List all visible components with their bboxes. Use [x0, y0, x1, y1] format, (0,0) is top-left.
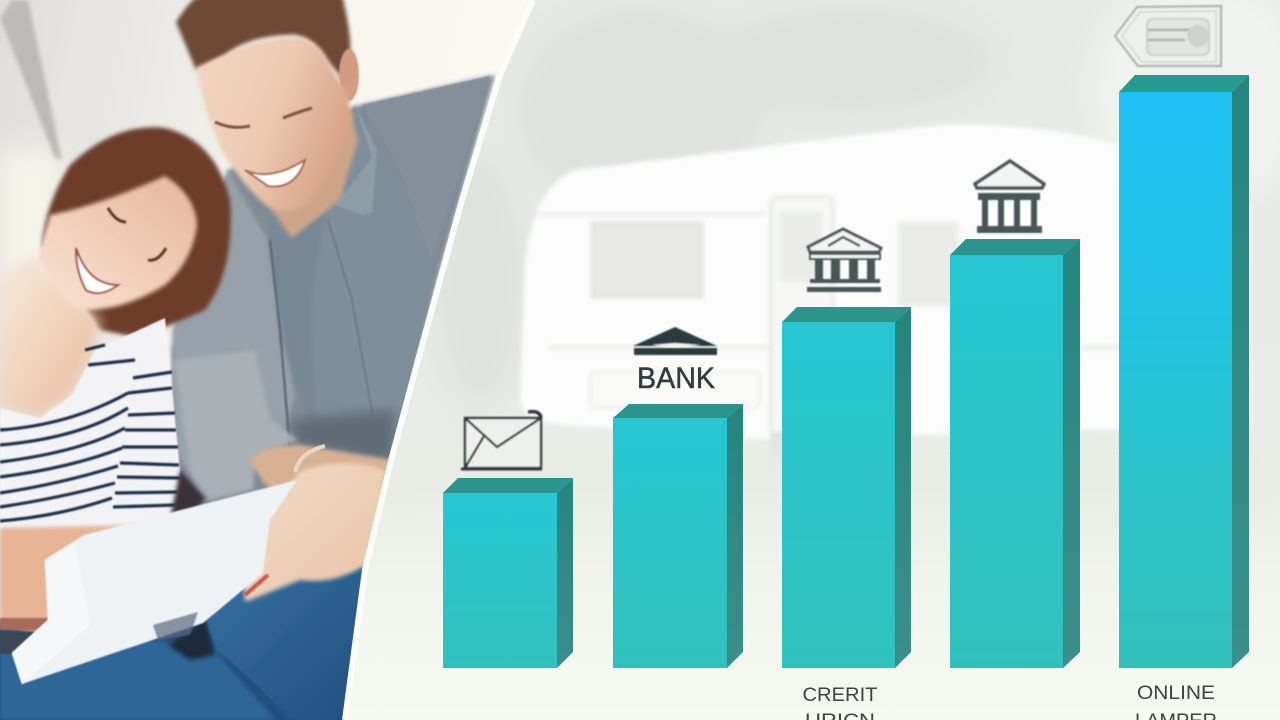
icon: credit union building: [807, 229, 881, 292]
man's shirt: [350, 104, 358, 112]
dark seat gap: [168, 468, 208, 514]
man's shirt placket: [328, 220, 372, 412]
faded light sky corner: [1090, 0, 1280, 210]
man's hair: [176, 0, 350, 78]
icon: classical bank building: [975, 161, 1044, 233]
faded tree line: [430, 0, 1000, 410]
curtain: [0, 0, 62, 160]
room wall: [0, 0, 530, 530]
bar 5: [1119, 75, 1249, 668]
jeans: front leg: [0, 640, 275, 720]
man's ear: [339, 49, 359, 101]
label: online lender: [1135, 683, 1217, 720]
woman's face: [38, 176, 197, 310]
bar 1: [443, 478, 573, 668]
man's lower shirt shadow: [290, 410, 395, 462]
label: online lender: ONLINE: [1137, 683, 1215, 704]
man's eyes: [215, 108, 312, 127]
man's jacket: [169, 72, 496, 614]
bar 4: [950, 239, 1080, 668]
man's face: [196, 37, 352, 211]
painted nails: [245, 575, 268, 595]
label: BANK: BANK: [637, 362, 715, 395]
jeans: right leg: [205, 565, 372, 720]
background: faded caravan scene: [340, 0, 1280, 720]
paper document: [12, 480, 297, 684]
woman's hair: [42, 127, 231, 338]
dark gap between legs: [168, 620, 215, 660]
shirt collar: [336, 112, 377, 214]
bar 3: [782, 307, 911, 668]
icon: bank roof: [633, 327, 717, 355]
jeans: dark base: [0, 620, 380, 720]
woman's neck and chest: [0, 255, 100, 418]
woman's striped top: [0, 318, 180, 528]
man's smile: [245, 160, 305, 186]
diagonal white divider: [345, 0, 533, 720]
faded caravan: [520, 125, 1250, 468]
photo: smiling couple reading a document: [0, 0, 540, 720]
label: credit union: CRERIT: [802, 685, 878, 706]
man's sleeve: [174, 350, 298, 500]
lapel line: [270, 240, 290, 450]
woman's arm: [0, 522, 128, 633]
bracelet: [295, 446, 325, 472]
faded ground: [380, 452, 1280, 502]
label: credit union: [802, 685, 878, 720]
forearm: [250, 445, 392, 510]
icon: envelope: [461, 412, 542, 469]
woman's smile: [76, 248, 118, 293]
icon: online lender card tag: [1115, 6, 1221, 66]
hand: [243, 463, 385, 602]
lap detail: [0, 618, 55, 630]
bar chart: five sources: [443, 75, 1249, 668]
woman's eyes: [108, 208, 166, 260]
man's neck: [265, 110, 358, 238]
bar 2: [613, 404, 743, 668]
